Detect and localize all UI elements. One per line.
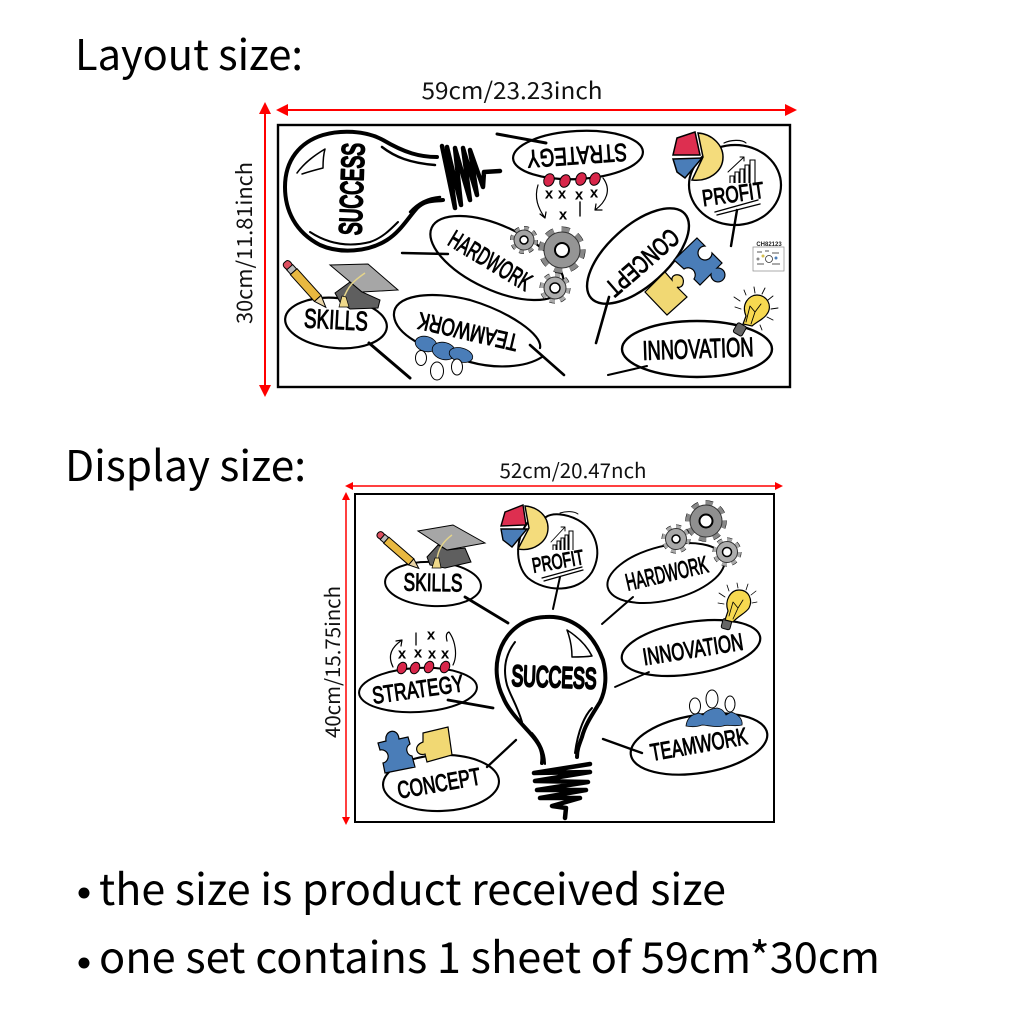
callout: teamwork display: TEAMWORK [648,723,750,767]
callout: concept layout [571,192,725,343]
callout: strategy layout: x [559,206,568,224]
icon: puzzle pieces [378,727,452,773]
callout: teamwork layout: TEAMWORK [415,306,521,356]
callout: hardwork display: HARDWORK [623,551,711,597]
callout: strategy display: x [428,646,437,662]
callout: profit display [501,505,597,609]
icon: graduation cap [418,525,485,568]
callout: profit layout [673,132,781,246]
note: received size: the size is product received size [99,856,726,918]
dimension label: display width: 52cm/20.47nch [500,455,646,484]
dimension arrow: display width [345,482,783,490]
bulb: success display: SUCCESS [511,661,597,695]
callout: strategy layout [497,128,644,224]
note: sheet contents: one set contains 1 sheet of 59cm*30cm [99,924,880,986]
callout: strategy layout: x [558,186,567,202]
icon: pencil [375,530,421,571]
callout: concept display [378,727,516,813]
icon: team people [413,334,474,380]
callout: strategy layout: x [545,186,554,202]
callout: concept layout: CONCEPT [600,223,684,301]
icon: gears [512,228,582,301]
thumbnail: sku label: CH82123 [756,242,782,248]
callout: innovation display [615,583,764,687]
dimension label: layout width: 59cm/23.23inch [422,72,602,106]
panel: display arrangement [355,494,774,822]
callout: skills display: SKILLS [403,568,463,598]
callout: strategy display: x [441,646,450,662]
callout: profit display: PROFIT [530,546,586,578]
callout: strategy layout: x [575,186,584,204]
heading: layout size: Layout size: [75,22,303,83]
icon: graduation cap [330,264,398,309]
dimension arrow: display height [342,492,350,825]
bulb: success layout [285,132,500,251]
icon: puzzle pieces [645,238,725,315]
callout: skills layout: SKILLS [303,303,369,337]
callout: profit layout: PROFIT [700,177,766,211]
callout: strategy layout: STRATEGY [526,138,628,172]
dimension label: display height: 40cm/15.75inch [317,586,346,738]
dimension arrow: layout width [276,104,797,116]
callout: innovation display: INNOVATION [641,629,745,671]
callout: strategy layout: x [590,184,599,202]
bulb: success display [497,617,605,818]
callout: concept display: CONCEPT [395,763,483,805]
callout: innovation layout: INNOVATION [642,332,754,366]
bulb: success layout: SUCCESS [333,142,371,236]
thumbnail: sku label [753,242,784,271]
callout: strategy display: STRATEGY [371,670,465,710]
callout: innovation layout [608,287,778,377]
icon: gears [664,503,739,564]
icon: light bulb [718,583,757,630]
icon: pencil [282,259,329,310]
callout: skills display [375,525,508,623]
callout: strategy display: x [398,646,407,662]
icon: team people [686,690,742,727]
callout: strategy display [358,626,493,715]
callout: teamwork layout [394,295,564,380]
callout: skills layout [282,259,410,378]
panel: layout sheet [278,125,790,387]
icon: light bulb [733,287,778,337]
dimension arrow: layout height [259,102,271,397]
callout: hardwork layout [402,199,582,317]
callout: strategy display: x [414,644,423,662]
dimension label: layout height: 30cm/11.81inch [229,162,259,324]
heading: display size: Display size: [65,433,306,494]
callout: strategy display: x [427,626,436,644]
callout: hardwork display [601,503,739,624]
callout: teamwork display [603,690,772,783]
callout: hardwork layout: HARDWORK [443,225,537,297]
